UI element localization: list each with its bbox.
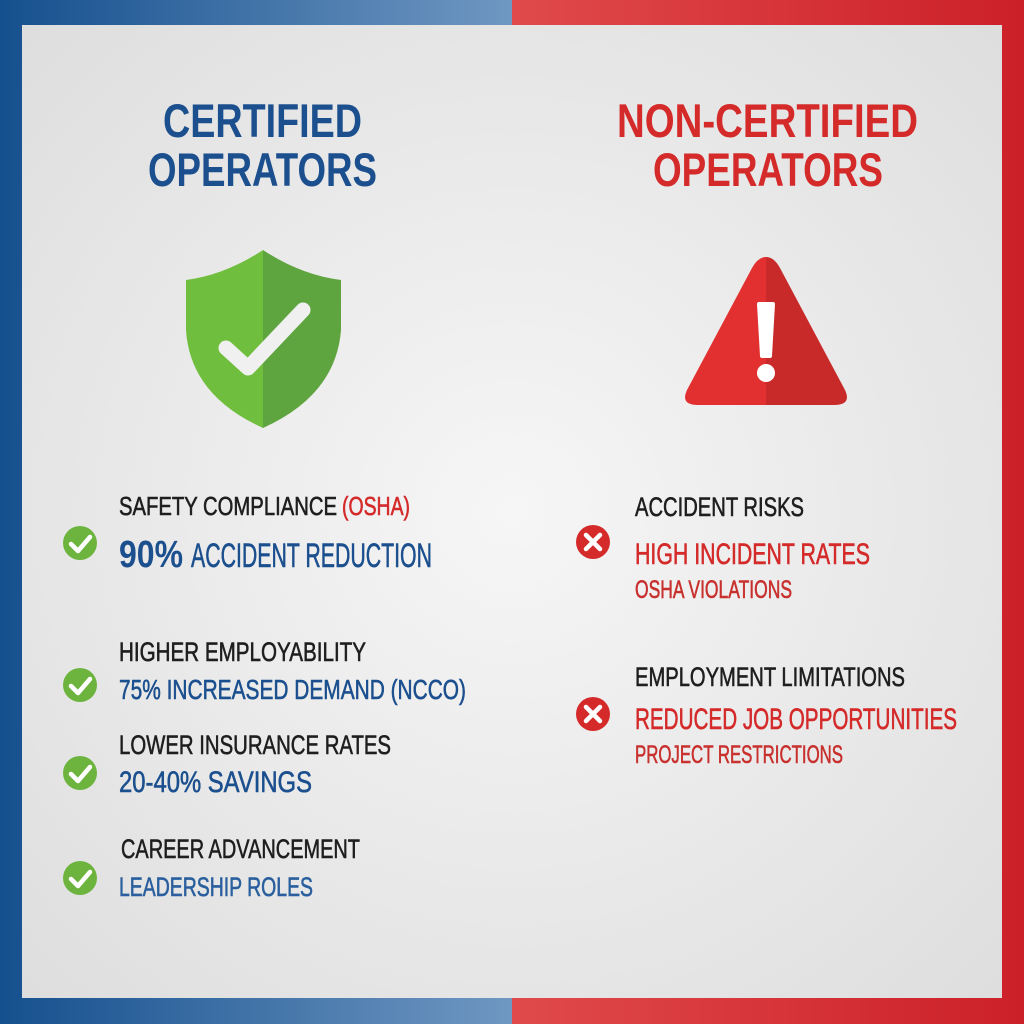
title: non-certified operators: OPERATORS <box>653 143 883 196</box>
item: safety compliance: 90% <box>119 534 183 576</box>
title: non-certified operators <box>617 94 918 196</box>
item: employment limitations: PROJECT RESTRICTIONS <box>635 741 843 769</box>
item: higher employability: 75% INCREASED DEMAND (NCCO) <box>119 674 466 705</box>
list: certified benefits <box>63 491 466 902</box>
title: certified operators: CERTIFIED <box>163 94 362 147</box>
item: lower insurance rates: LOWER INSURANCE RATES <box>119 730 391 760</box>
icon: red warning triangle <box>685 257 847 405</box>
frame right red <box>512 0 1024 1024</box>
item: safety compliance: (OSHA) <box>342 491 410 521</box>
item: safety compliance <box>63 491 432 576</box>
item: career advancement: CAREER ADVANCEMENT <box>121 834 360 864</box>
item: employment limitations: EMPLOYMENT LIMITATIONS <box>635 662 905 692</box>
item: accident risks <box>576 492 870 604</box>
title: non-certified operators: NON-CERTIFIED <box>617 94 918 147</box>
item: career advancement <box>63 834 360 902</box>
item: lower insurance rates: 20-40% SAVINGS <box>119 766 312 799</box>
item: safety compliance: ACCIDENT REDUCTION <box>191 537 432 575</box>
item: lower insurance rates <box>63 730 391 799</box>
item: accident risks: HIGH INCIDENT RATES <box>635 538 870 571</box>
list: non-certified drawbacks <box>576 492 957 769</box>
item: employment limitations <box>576 662 957 769</box>
item: accident risks: OSHA VIOLATIONS <box>635 576 792 604</box>
item: accident risks: ACCIDENT RISKS <box>635 492 804 522</box>
item: higher employability <box>63 637 466 705</box>
icon: green shield with check <box>186 250 341 428</box>
title: certified operators <box>148 94 377 196</box>
frame left blue <box>0 0 512 1024</box>
title: certified operators: OPERATORS <box>148 143 377 196</box>
item: safety compliance: SAFETY COMPLIANCE <box>119 491 337 521</box>
item: career advancement: LEADERSHIP ROLES <box>119 872 313 902</box>
item: higher employability: HIGHER EMPLOYABILITY <box>119 637 366 667</box>
